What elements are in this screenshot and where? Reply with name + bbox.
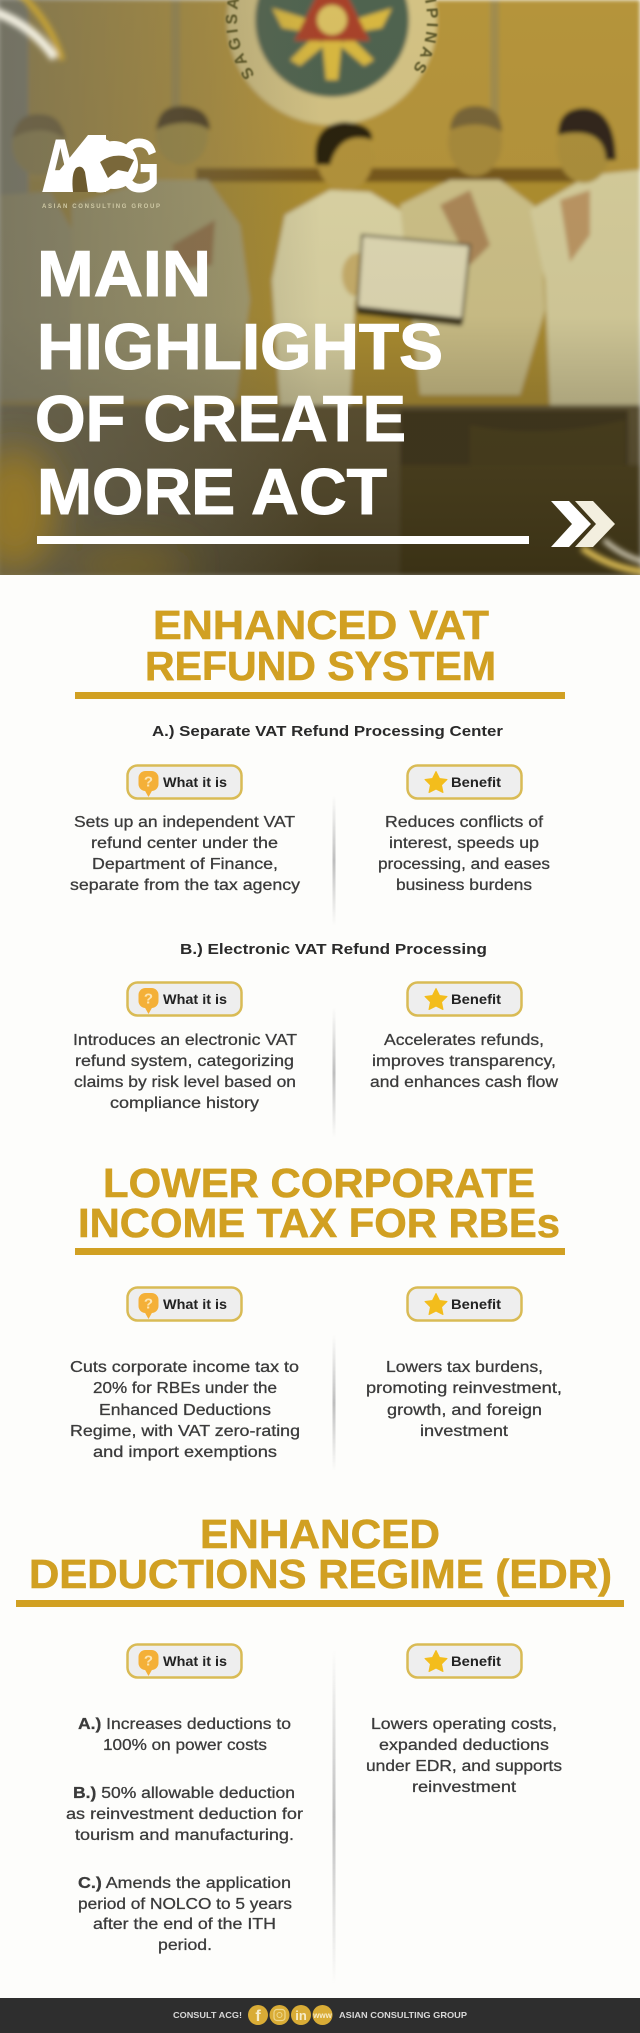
title underline	[37, 536, 529, 544]
what it is text: Cuts corporate income tax to	[70, 1359, 299, 1376]
title: MORE ACT	[37, 455, 387, 528]
what it is text: separate from the tax agency	[70, 877, 300, 894]
badge: benefit	[408, 982, 522, 1016]
benefit text: Accelerates refunds,	[384, 1032, 544, 1049]
benefit text: and enhances cash flow	[370, 1074, 558, 1091]
what it is text: period.	[158, 1937, 212, 1954]
what it is text: refund system, categorizing	[75, 1053, 294, 1070]
badge: benefit	[408, 766, 522, 798]
badge: benefit	[408, 1288, 522, 1320]
what it is text: Enhanced Deductions	[99, 1402, 271, 1419]
icon: instagram	[270, 2005, 290, 2025]
what it is text: compliance history	[110, 1095, 259, 1112]
benefit text: under EDR, and supports	[366, 1758, 562, 1775]
badge: what it is	[128, 1288, 242, 1320]
person 1	[0, 192, 78, 400]
what it is text: 100% on power costs	[103, 1737, 267, 1754]
heading: LOWER CORPORATE	[103, 1160, 535, 1206]
heading	[145, 602, 496, 689]
seal	[227, 0, 437, 125]
benefit text: Lowers operating costs,	[371, 1716, 557, 1733]
heading	[29, 1511, 612, 1597]
person 5	[530, 170, 640, 405]
what it is text: Introduces an electronic VAT	[73, 1032, 297, 1049]
title	[35, 237, 443, 528]
benefit text: processing, and eases	[378, 856, 550, 873]
what it is text	[73, 1032, 297, 1112]
benefit text: investment	[420, 1423, 509, 1440]
what it is text: Regime, with VAT zero-rating	[70, 1423, 300, 1440]
what it is text: tourism and manufacturing.	[75, 1827, 294, 1844]
title: MAIN	[37, 237, 211, 310]
panel: lower corporate income tax	[70, 1160, 565, 1471]
heading rule	[75, 692, 565, 699]
what it is text: B.) 50% allowable deduction	[73, 1785, 295, 1802]
benefit text: business burdens	[396, 877, 532, 894]
desk	[0, 405, 640, 575]
heading: INCOME TAX FOR RBEs	[78, 1200, 560, 1246]
benefit text: Lowers tax burdens,	[386, 1359, 543, 1376]
what it is text: Department of Finance,	[92, 856, 278, 873]
what it is text: as reinvestment deduction for	[66, 1806, 304, 1823]
footer brand name: ASIAN CONSULTING GROUP	[339, 2010, 467, 2020]
heading: DEDUCTIONS REGIME (EDR)	[29, 1551, 612, 1597]
benefit text	[370, 1032, 558, 1091]
what it is text	[70, 1359, 300, 1461]
what it is text: after the end of the ITH	[93, 1916, 276, 1933]
document	[357, 235, 470, 322]
what it is text	[66, 1716, 304, 1954]
icon: facebook: f	[255, 2008, 261, 2025]
what it is text: A.) Increases deductions to	[78, 1716, 291, 1733]
panel: enhanced VAT refund system	[70, 602, 565, 1138]
what it is text	[70, 814, 300, 894]
what it is text: C.) Amends the application	[78, 1875, 291, 1892]
benefit text	[366, 1716, 562, 1796]
what it is text: period of NOLCO to 5 years	[78, 1896, 292, 1913]
badge: what it is	[128, 982, 242, 1016]
benefit text: Reduces conflicts of	[385, 814, 544, 831]
benefit text: expanded deductions	[379, 1737, 549, 1754]
benefit text: growth, and foreign	[387, 1402, 542, 1419]
icon: website: www	[312, 2011, 333, 2020]
benefit text	[366, 1359, 562, 1440]
benefit text: promoting reinvestment,	[366, 1380, 562, 1397]
logo tagline: ASIAN CONSULTING GROUP	[42, 204, 160, 210]
heading rule	[16, 1600, 624, 1607]
panel: hero photo	[0, 0, 640, 575]
heading	[78, 1160, 560, 1246]
title: OF CREATE	[35, 382, 406, 455]
what it is text: and import exemptions	[93, 1444, 277, 1461]
what it is text: refund center under the	[91, 835, 278, 852]
benefit text: interest, speeds up	[389, 835, 539, 852]
subheading B: B.) Electronic VAT Refund Processing	[180, 941, 487, 958]
what it is text: Sets up an independent VAT	[74, 814, 295, 831]
icon: double chevron arrow	[551, 501, 615, 547]
logo: Asian Consulting Group	[41, 124, 160, 210]
benefit text	[378, 814, 550, 894]
heading: ENHANCED	[200, 1511, 440, 1557]
what it is text: claims by risk level based on	[74, 1074, 296, 1091]
icon: linkedin: in	[295, 2008, 307, 2023]
badge: what it is	[128, 1644, 242, 1678]
icon: linkedin	[291, 2005, 311, 2025]
benefit text: reinvestment	[412, 1779, 517, 1796]
subheading A: A.) Separate VAT Refund Processing Center	[152, 723, 503, 740]
benefit text: improves transparency,	[372, 1053, 556, 1070]
heading rule	[75, 1248, 565, 1255]
badge: what it is	[128, 766, 242, 798]
person 4	[400, 180, 545, 395]
logo: Asian Consulting Group: ACG	[41, 124, 160, 209]
footer call to action: CONSULT ACG!	[173, 2010, 242, 2020]
badge: benefit	[408, 1644, 522, 1678]
hero shade	[0, 0, 640, 575]
icon: website	[312, 2005, 333, 2025]
icon: facebook	[248, 2005, 268, 2025]
footer bar	[0, 1998, 640, 2033]
person 2	[70, 180, 250, 400]
person 3 center	[272, 190, 415, 405]
title: HIGHLIGHTS	[37, 310, 443, 383]
heading: ENHANCED VAT	[153, 602, 489, 648]
heading: REFUND SYSTEM	[145, 643, 496, 689]
panel: enhanced deductions regime	[16, 1511, 624, 1984]
what it is text: 20% for RBEs under the	[93, 1380, 277, 1397]
